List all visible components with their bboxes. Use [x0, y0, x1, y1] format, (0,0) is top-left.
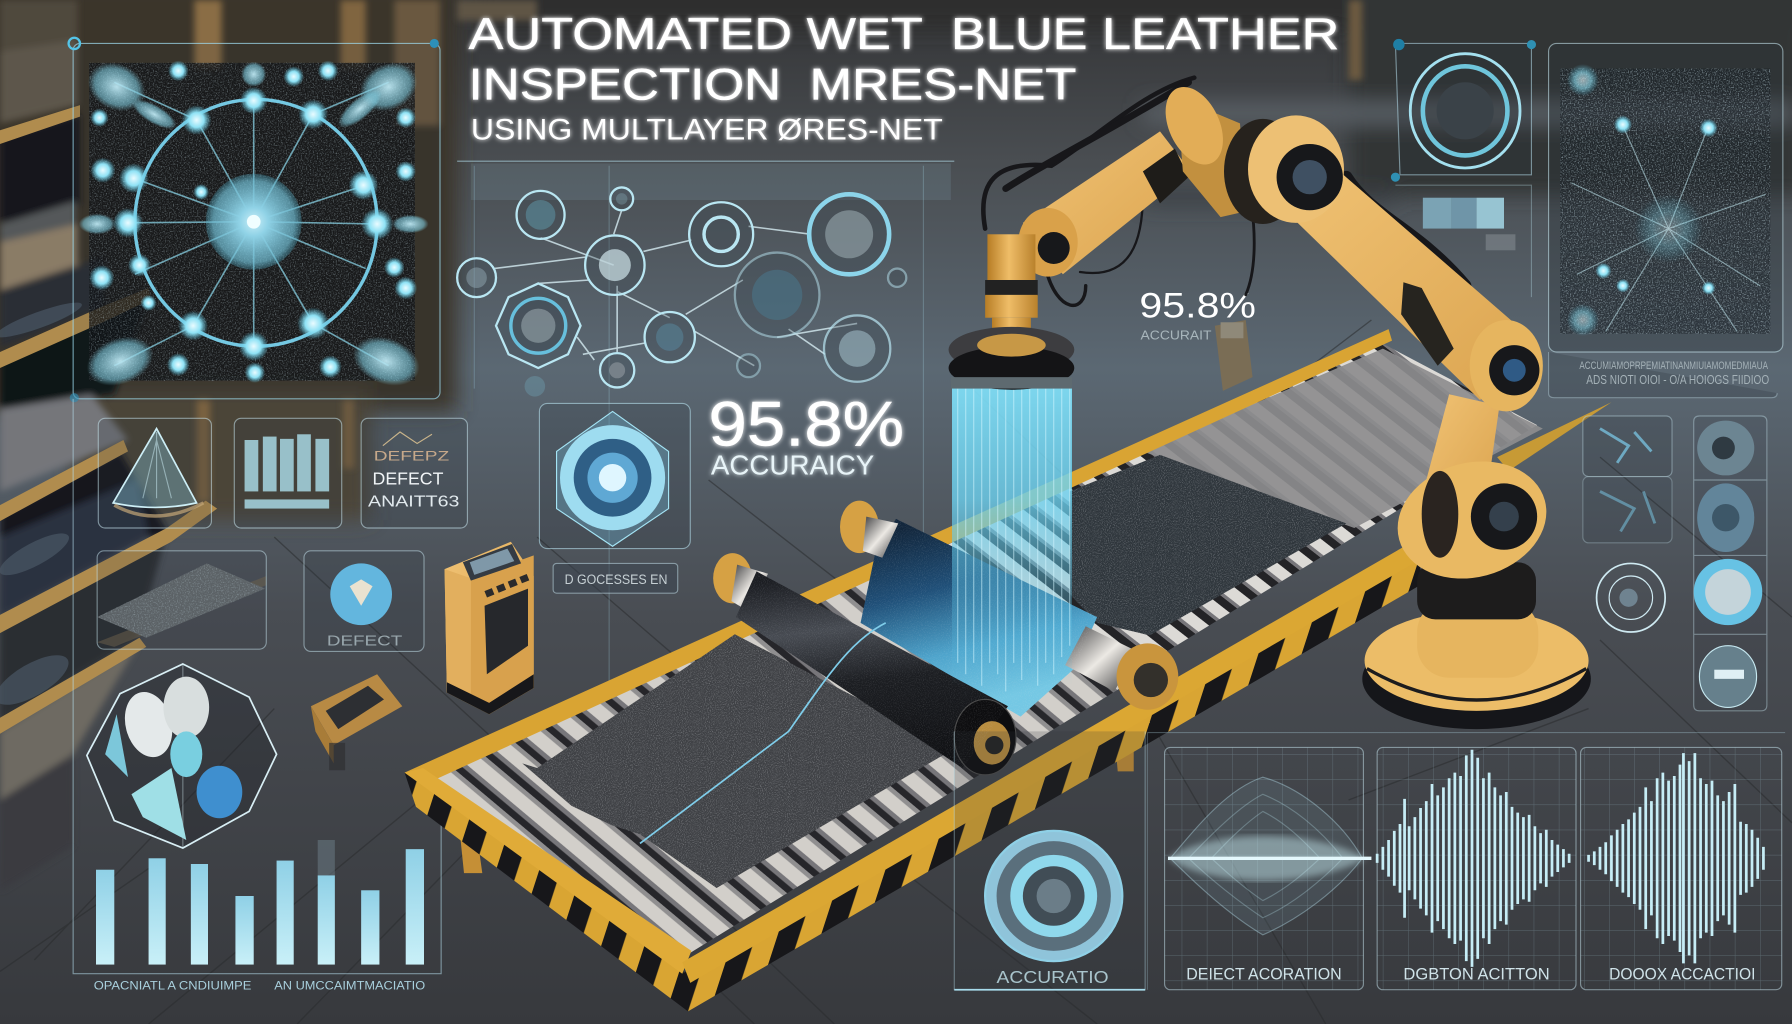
title	[469, 10, 1339, 146]
end hazard rail	[405, 773, 688, 1011]
panel: central network diagram	[457, 161, 954, 731]
far roller bed	[891, 341, 1537, 680]
light beam	[952, 386, 1072, 691]
wrist joint	[1384, 445, 1560, 595]
panel: leather swatch	[97, 551, 266, 649]
title line 2: INSPECTION MRES-NET	[469, 60, 1077, 109]
node	[517, 191, 565, 239]
node	[645, 312, 695, 362]
panel: target hexagon	[539, 403, 690, 549]
status label box: D GOCESSES EN	[565, 572, 667, 587]
forearm	[1280, 171, 1537, 400]
panel: right network	[1549, 43, 1783, 352]
shoulder connector	[1177, 97, 1246, 217]
defect caption: DEFECT	[327, 634, 402, 650]
nozzle disc	[949, 327, 1074, 390]
back leather sheet	[1070, 455, 1346, 635]
left long frame and bar chart caption	[73, 399, 441, 993]
main joint	[1248, 115, 1344, 223]
leather grain texture	[503, 451, 1360, 897]
defect label: DEFECT	[373, 469, 444, 489]
node	[809, 194, 889, 274]
right icon panels	[1583, 416, 1767, 711]
small accuracy readout	[1139, 286, 1256, 342]
near roller bed	[421, 549, 1143, 958]
roller end: left front knob	[713, 553, 768, 611]
subtitle: USING MULTLAYER ØRES-NET	[471, 113, 943, 146]
faded bar extension	[318, 840, 335, 877]
panel: cone icon	[98, 418, 211, 528]
shoulder cable wrap	[1224, 119, 1302, 224]
roller end: right metal and knob	[1065, 626, 1178, 710]
node	[600, 353, 634, 387]
node	[689, 202, 753, 266]
end gold rail	[405, 768, 691, 974]
bar chart	[96, 840, 424, 965]
panel: wave three	[1581, 747, 1782, 990]
rail streak behind arm	[1497, 402, 1611, 471]
node	[737, 354, 760, 377]
panel label: DEIECT ACORATION	[1186, 964, 1342, 983]
panel: left neural network	[69, 38, 440, 402]
panel: blueprint two	[1583, 477, 1672, 543]
elbow joint	[1470, 320, 1543, 411]
analysis label: ANAITT63	[368, 493, 460, 510]
node	[525, 376, 545, 397]
far rail	[405, 329, 1392, 786]
kiosk terminal	[445, 542, 534, 714]
base column	[1417, 600, 1538, 678]
tool joint	[1018, 208, 1078, 277]
panel: defect circle	[304, 551, 424, 651]
panel label: DGBTON ACITTON	[1403, 964, 1550, 983]
crystal polygon chart	[87, 664, 277, 848]
accuracy dial panel	[954, 731, 1145, 990]
right secondary panel	[1395, 185, 1531, 297]
panel column frame	[1694, 416, 1767, 711]
near hazard rail	[682, 555, 1424, 1011]
icon: lens	[1699, 646, 1757, 707]
defect label: DEFEPZ	[374, 449, 449, 464]
light back rollers	[1143, 349, 1543, 528]
tray	[311, 674, 402, 770]
cables	[983, 78, 1465, 305]
conveyor	[405, 329, 1611, 1011]
robot arm	[949, 78, 1591, 729]
title line 1: AUTOMATED WET BLUE LEATHER	[469, 10, 1339, 59]
dial caption: ACCURATIO	[997, 967, 1109, 987]
panel: defect analysis	[361, 418, 467, 528]
near gold rail	[682, 542, 1419, 983]
node	[824, 315, 890, 382]
node	[585, 235, 645, 295]
right top circular panel	[1391, 39, 1536, 182]
panel: blueprint one	[1583, 416, 1672, 477]
panel label: DOOOX ACCACTIOI	[1609, 964, 1755, 983]
panel group: waveform charts	[1147, 733, 1785, 990]
front leather sheet	[522, 634, 954, 888]
accuracy label: ACCURAICY	[711, 449, 874, 480]
panel: wave two	[1377, 747, 1576, 990]
arm clamp	[1143, 149, 1189, 203]
icon: disc two	[1697, 483, 1754, 552]
panel: defect wave mesh	[1165, 747, 1371, 990]
node	[610, 187, 633, 210]
left long frame and bar chart caption: AN UMCCAIMTMACIATIO	[274, 979, 425, 993]
black leather roll	[736, 571, 1016, 775]
icon: cyan ring	[1694, 559, 1762, 625]
accuracy callout	[709, 390, 904, 480]
icon: ring target	[1597, 563, 1665, 632]
right caption panel	[1549, 352, 1777, 398]
node	[496, 283, 581, 368]
roll grain texture	[731, 514, 1103, 777]
blue scan line on leather	[640, 623, 886, 843]
base disc	[1362, 610, 1591, 729]
forearm control panel	[1401, 282, 1454, 366]
status label box	[553, 563, 678, 593]
accuracy value: 95.8%	[709, 390, 904, 460]
panel: bars icon	[234, 418, 342, 528]
node	[888, 269, 906, 287]
lower arm	[1426, 394, 1499, 503]
blue leather	[861, 519, 1097, 717]
readout label: ACCURAIT	[1141, 328, 1212, 342]
tool column	[985, 234, 1038, 345]
small sensor device	[1215, 320, 1253, 391]
upper arm	[1023, 131, 1191, 274]
readout value: 95.8%	[1139, 286, 1256, 326]
node	[735, 253, 819, 337]
icon: disc one	[1697, 421, 1754, 475]
roller end: left back knob	[840, 501, 898, 558]
conveyor legs	[459, 722, 1134, 873]
left long frame and bar chart caption: OPACNIATL A CNDIUIMPE	[94, 979, 251, 993]
base neck	[1417, 562, 1536, 619]
node	[457, 258, 496, 297]
shoulder hub	[1154, 78, 1234, 174]
